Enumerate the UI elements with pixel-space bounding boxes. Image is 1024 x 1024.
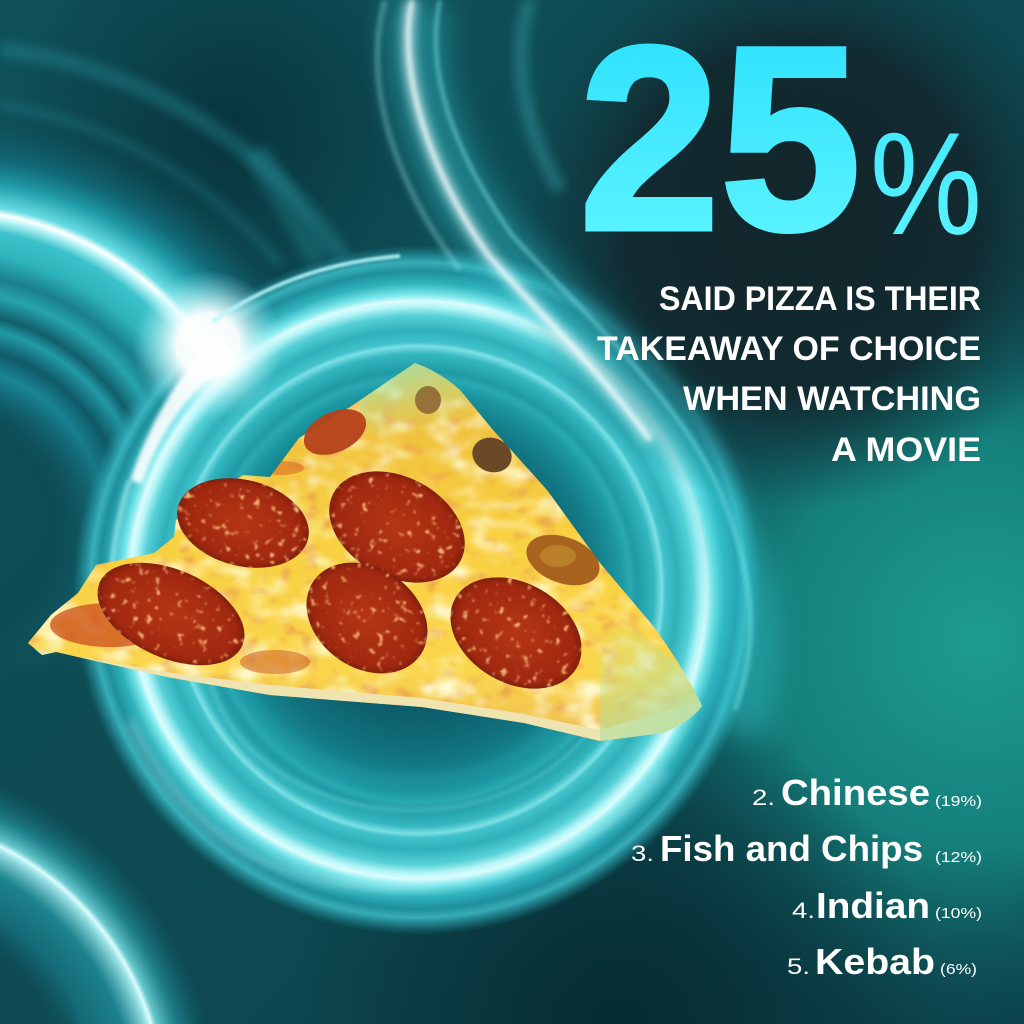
item: Indian <box>792 885 982 926</box>
statement text: WHEN WATCHING <box>683 380 981 418</box>
item: Kebab: Kebab <box>815 941 935 982</box>
item: Chinese: 2. <box>752 785 775 810</box>
inner lower rings <box>130 490 665 887</box>
pizza slice <box>20 355 710 750</box>
item: Kebab: (6%) <box>940 961 977 978</box>
item: Fish and Chips: (12%) <box>935 849 982 866</box>
statement text: SAID PIZZA IS THEIR <box>659 280 981 318</box>
bottom-left ring <box>0 760 240 1024</box>
item: Chinese: Chinese <box>781 772 930 813</box>
item: Chinese <box>752 772 982 813</box>
slice body <box>20 355 710 750</box>
lens flare <box>110 256 400 590</box>
item: Indian: 4. <box>792 898 815 923</box>
statement text <box>597 280 981 469</box>
percent sign: % <box>870 102 982 265</box>
item: Indian: Indian <box>816 885 930 926</box>
item: Fish and Chips: 3. <box>631 841 654 866</box>
item: Kebab <box>787 941 977 982</box>
statement text: TAKEAWAY OF CHOICE <box>597 330 981 368</box>
pepperoni slices <box>98 471 582 689</box>
item: Chinese: (19%) <box>935 793 982 810</box>
item: Indian: (10%) <box>935 905 982 922</box>
upper-left ring <box>0 137 262 604</box>
statement text: A MOVIE <box>831 431 981 469</box>
upper-right swirl <box>377 0 750 730</box>
big statistic: 25 <box>579 0 861 285</box>
small browned toppings <box>297 386 607 595</box>
faint upper-left arcs <box>0 50 345 265</box>
item: Kebab: 5. <box>787 954 810 979</box>
item: Fish and Chips: Fish and Chips <box>660 828 923 869</box>
central ring <box>73 245 763 935</box>
ranked list <box>631 772 982 982</box>
